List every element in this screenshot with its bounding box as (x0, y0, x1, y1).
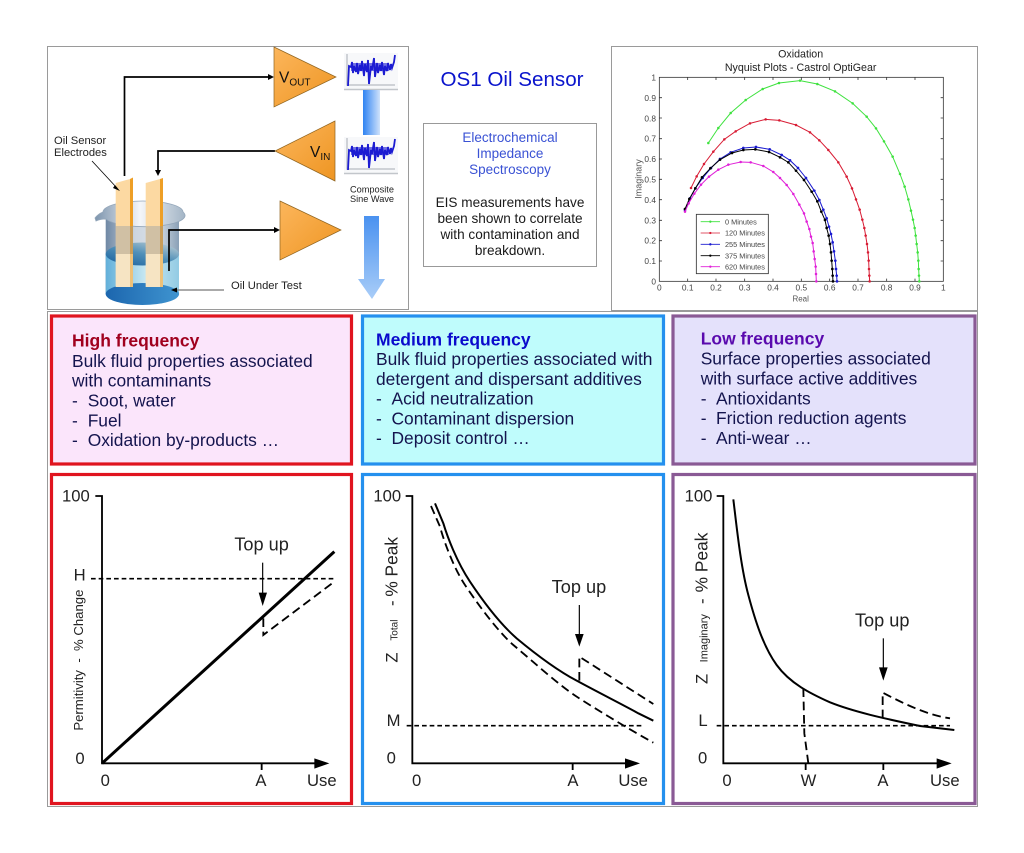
text block: low frequency properties: Surface properties associated (701, 349, 931, 369)
curve: after top up (883, 693, 950, 718)
heading: electrochemical impedance spectroscopy: Electrochemical (462, 130, 558, 145)
waveform thumbnail: output (344, 53, 398, 90)
arrow: top up (259, 563, 267, 606)
text block: high frequency properties: - (72, 410, 78, 430)
heading: electrochemical impedance spectroscopy: Impedance (477, 146, 543, 161)
label: oil sensor electrodes: Electrodes (54, 147, 107, 159)
text block: EIS description: been shown to correlate (437, 211, 583, 226)
axis tick labels: 0.9 (644, 93, 656, 103)
icon: beaker with oil and electrodes (95, 178, 185, 305)
heading: low frequency: Low frequency (701, 329, 824, 349)
text block: low frequency properties: - (701, 428, 707, 448)
text block: EIS description: with contamination and (439, 227, 580, 242)
axis tick labels: 1 (941, 282, 946, 292)
labels: A (567, 771, 579, 790)
axis tick labels: 0.8 (881, 282, 893, 292)
curve: 375 minutes (685, 149, 833, 281)
text block: low frequency properties: Friction reduction agents (716, 408, 907, 428)
labels: Top up (855, 611, 910, 631)
text block: low frequency properties: - (701, 388, 707, 408)
panel: low frequency (673, 316, 975, 464)
axis tick labels: 0 (651, 276, 656, 286)
axes (717, 496, 952, 770)
text block: EIS description: EIS measurements have (436, 195, 584, 210)
labels: 0 (698, 749, 707, 768)
panel: Z total chart (362, 474, 664, 804)
curve: 120 minutes (691, 119, 870, 281)
frame: lower section (48, 312, 978, 806)
labels: W (801, 771, 817, 790)
text block: high frequency properties: with contaminants (71, 371, 211, 391)
arrow: big blue down arrow (358, 216, 385, 299)
labels (62, 487, 337, 790)
axis tick labels: 0.6 (824, 282, 836, 292)
axis label: Z imaginary: - (693, 598, 712, 604)
amplifier: V in: IN (320, 152, 330, 163)
heading: high frequency: High frequency (72, 331, 200, 351)
axis tick labels: 0.1 (644, 256, 656, 266)
curve: 620 minutes (685, 162, 816, 281)
panel: high frequency (52, 316, 352, 464)
heading: medium frequency: Medium frequency (376, 330, 531, 350)
axis tick labels: 0.4 (644, 195, 656, 205)
amplifier: output (280, 201, 341, 260)
labels: 0 (722, 771, 732, 790)
legend (696, 214, 768, 274)
waveform thumbnail: input (344, 137, 398, 174)
curve: 255 minutes (685, 147, 837, 281)
curve: after top up (579, 657, 653, 704)
labels: Use (930, 771, 960, 790)
amplifier: V in (275, 121, 335, 181)
label: composite sine wave: Sine Wave (350, 194, 394, 204)
label: oil sensor electrodes: Oil Sensor (54, 135, 107, 147)
panel: permittivity chart (52, 474, 352, 804)
text block: low frequency properties: Anti-wear … (716, 428, 812, 448)
labels: 100 (373, 487, 401, 506)
axis label: permittivity: Permitivity - % Change (71, 590, 86, 731)
axis label: Z imaginary: Imaginary (699, 614, 711, 662)
text block: medium frequency properties: detergent and dispersant additives (376, 369, 642, 389)
text block: high frequency properties: Fuel (88, 410, 122, 430)
axis tick labels: 0.9 (909, 282, 921, 292)
label: composite sine wave: Composite (350, 185, 394, 195)
text block: high frequency properties: - (72, 390, 78, 410)
curve: 0 minutes (708, 81, 919, 281)
text block: high frequency properties: - (72, 430, 78, 450)
labels: Use (618, 771, 648, 790)
labels: 0 (387, 749, 396, 768)
arrow: top up (879, 638, 888, 681)
title: OS1 Oil Sensor (440, 68, 584, 91)
legend: 620 Minutes (725, 262, 765, 271)
axes (406, 496, 640, 770)
legend: 120 Minutes (725, 229, 765, 238)
amplifier: V in: V (310, 144, 320, 161)
axis tick labels: 0.5 (796, 282, 807, 292)
axis label: imaginary: Imaginary (634, 159, 644, 199)
curve: lower dashed (431, 506, 653, 743)
panel: Z imaginary chart (673, 474, 975, 804)
legend: 0 Minutes (725, 217, 757, 226)
text block: medium frequency properties: - (376, 428, 382, 448)
labels: 100 (62, 487, 90, 506)
axis label: Z total: % Peak (382, 537, 402, 597)
labels: A (877, 771, 889, 790)
curve: after top up (263, 582, 334, 635)
axis label: real: Real (792, 295, 809, 304)
axis tick labels (644, 73, 946, 292)
axis label: Z total: - (383, 600, 402, 606)
amplifier: V out: V (279, 69, 289, 86)
curve: Z total (435, 503, 653, 721)
axis label: Z imaginary: % Peak (692, 532, 712, 592)
heading: electrochemical impedance spectroscopy: Spectroscopy (469, 162, 551, 177)
curve: permittivity (102, 552, 334, 763)
axis tick labels: 0.3 (644, 215, 656, 225)
marker: W drop line (803, 688, 808, 763)
label: oil sensor electrodes (54, 135, 120, 191)
panel: sensor schematic (48, 46, 408, 310)
labels: 0 (412, 771, 421, 790)
labels: Top up (552, 577, 606, 597)
labels: L (698, 711, 708, 730)
labels (685, 487, 960, 790)
amplifier: V out (274, 47, 336, 107)
axis tick labels: 1 (651, 73, 656, 83)
axis label: Z imaginary: Z (693, 674, 712, 684)
axis tick labels: 0.8 (644, 113, 656, 123)
panel: medium frequency (362, 316, 664, 464)
threshold line M (407, 723, 643, 728)
axis tick labels: 0.2 (644, 236, 656, 246)
labels (373, 487, 648, 790)
chart title: Nyquist Plots - Castrol OptiGear (725, 62, 877, 74)
text block: medium frequency properties: Bulk fluid properties associated with (376, 349, 652, 369)
amplifier: V out: OUT (289, 77, 310, 88)
chart: Z total vs use (373, 487, 653, 790)
labels: 0 (75, 749, 85, 768)
axis label: Z total: Z (383, 652, 402, 663)
text block: high frequency properties: Oxidation by-products … (88, 430, 279, 450)
text block: high frequency properties: Bulk fluid properties associated (72, 351, 313, 371)
arrow: oil to output amplifier (169, 227, 280, 271)
legend: 375 Minutes (725, 251, 765, 260)
chart: permittivity vs use (62, 487, 337, 790)
axis tick labels: 0.7 (852, 282, 864, 292)
axis tick labels: 0 (657, 282, 662, 292)
panel: Nyquist plot (612, 46, 978, 310)
legend: 255 Minutes (725, 240, 765, 249)
axis label: Z total: Total (390, 620, 401, 641)
chart: Nyquist curves (634, 49, 946, 304)
labels: Use (307, 771, 337, 790)
arrow: top up (575, 605, 584, 647)
arrow: electrode to V out (124, 74, 274, 176)
chart: Z imaginary vs use (685, 487, 960, 790)
threshold line L (717, 723, 950, 728)
text block: low frequency properties: with surface active additives (700, 368, 918, 388)
text block: low frequency properties: Antioxidants (716, 388, 811, 408)
label: oil under test: Oil Under Test (231, 280, 303, 292)
labels: 100 (685, 487, 712, 506)
labels: M (387, 711, 401, 730)
threshold line H (91, 576, 334, 581)
connector: blue bar (363, 90, 380, 135)
curve: Z imaginary (733, 499, 954, 730)
arrow: V in to electrode (155, 151, 275, 176)
text block: high frequency properties: Soot, water (88, 390, 176, 410)
axis tick labels: 0.1 (682, 282, 694, 292)
axis tick labels: 0.4 (767, 282, 779, 292)
labels: A (255, 771, 267, 790)
axis tick labels: 0.7 (644, 134, 656, 144)
text block: medium frequency properties: - (376, 389, 382, 409)
chart title: Oxidation (778, 49, 823, 61)
axis tick labels: 0.2 (710, 282, 722, 292)
labels: H (74, 565, 86, 584)
text block: medium frequency properties: Contaminant dispersion (392, 408, 574, 428)
text block: medium frequency properties: Acid neutralization (392, 389, 534, 409)
axis tick labels: 0.6 (644, 154, 656, 164)
axis tick labels: 0.5 (644, 174, 656, 184)
text block: medium frequency properties: Deposit control … (392, 428, 530, 448)
text block: medium frequency properties: - (376, 408, 382, 428)
text block: EIS description: breakdown. (475, 243, 545, 258)
axis tick labels: 0.3 (739, 282, 751, 292)
panel: EIS explanation (424, 124, 596, 266)
labels: Top up (234, 535, 289, 555)
plot axes (659, 77, 943, 281)
label: oil under test (171, 280, 303, 292)
axes (95, 496, 329, 770)
text block: low frequency properties: - (701, 408, 707, 428)
labels: 0 (101, 771, 110, 790)
